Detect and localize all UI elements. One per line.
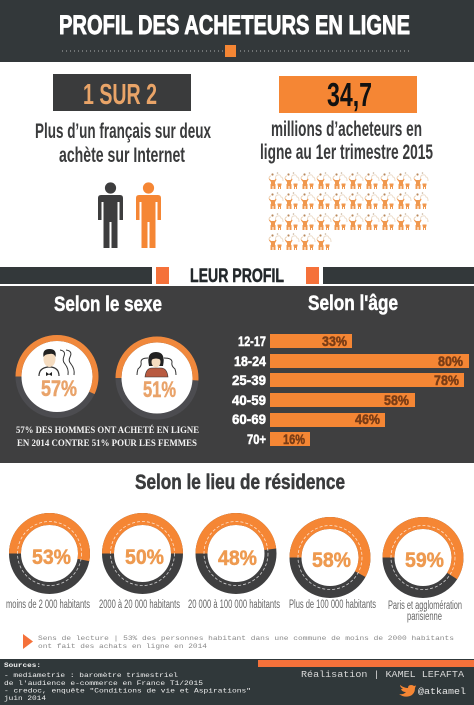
sources: de l'audience e-commerce en France T1/2015: [4, 680, 203, 687]
heading: selon le sexe: Selon le sexe: [54, 293, 162, 316]
bar 18-24: 18-24: [234, 353, 266, 369]
gauge: hommes 57%: 57%: [41, 376, 77, 401]
icon grid: 34 shoppers: [269, 172, 428, 250]
heading: selon l'âge: Selon l'âge: [308, 292, 398, 315]
donut labels: 2000 à 20 000 habitants: [99, 599, 180, 611]
caption: sexe: 57% DES HOMMES ONT ACHETÉ EN LIGNE: [16, 425, 199, 435]
stat: 34,7: [279, 76, 417, 113]
donut: 48%: [202, 519, 270, 588]
donut: 59%: 59%: [405, 549, 444, 572]
donut: 58%: 58%: [312, 549, 351, 572]
section banner: leur profil: [0, 266, 474, 287]
icon: women: [137, 352, 176, 377]
gauge: hommes 57%: [18, 338, 96, 415]
text: millions d'acheteurs: [260, 118, 433, 164]
gauge: femmes 51%: 51%: [143, 377, 176, 402]
stat: 34,7: 34,7: [327, 76, 372, 113]
footer: [0, 659, 474, 705]
bar 18-24: 80%: [438, 353, 463, 369]
bar 60-69: 60-69: [232, 411, 266, 427]
sources: [4, 662, 251, 702]
bar chart: âge: [232, 333, 469, 447]
bar 60-69: [232, 411, 385, 427]
bar 25-39: 25-39: [232, 372, 266, 388]
sources: - mediametrie : baromètre trimestriel: [4, 672, 178, 679]
bar 12-17: 12-17: [238, 333, 266, 349]
sources: juin 2014: [4, 695, 46, 702]
bar 70+: 70+: [247, 431, 266, 447]
reading note: ont fait des achats en ligne en 2014: [38, 643, 208, 650]
text: plus d'un français: achète sur Internet: [59, 144, 185, 167]
donut: 53%: [15, 519, 84, 588]
bar 40-59: [232, 392, 415, 408]
reading note: [23, 634, 455, 650]
donut: 59%: [388, 523, 458, 592]
bar 12-17: [238, 333, 352, 349]
text: plus d'un français: Plus d’un français sur deux: [35, 120, 211, 143]
bar 60-69: 46%: [355, 411, 380, 427]
stat: 1 sur 2: 1 SUR 2: [83, 79, 157, 111]
bar 70+: 16%: [283, 431, 305, 447]
donut: 58%: [296, 523, 364, 592]
donut labels: Plus de 100 000 habitants: [289, 599, 376, 611]
caption: sexe: [16, 425, 199, 448]
donut: 50%: [108, 519, 177, 588]
donut: 48%: 48%: [218, 547, 257, 570]
bar 25-39: 78%: [434, 372, 459, 388]
bar 18-24: [234, 353, 469, 369]
gauge: femmes 51%: [118, 340, 196, 416]
bar 70+: [247, 431, 310, 447]
panel: leur profil: [0, 286, 474, 463]
bar 40-59: 58%: [384, 392, 409, 408]
bar 12-17: 33%: [322, 333, 347, 349]
donut labels: [6, 599, 462, 623]
icon: men: [39, 349, 74, 376]
icon: twitter bird: [399, 685, 416, 697]
donut labels: moins de 2 000 habitants: [6, 599, 90, 611]
heading: lieu de résidence: Selon le lieu de résidence: [135, 471, 345, 494]
stat: 1 sur 2: [53, 74, 191, 111]
text: plus d'un français: [35, 120, 211, 167]
bar 25-39: [232, 372, 464, 388]
donut: 53%: 53%: [32, 546, 71, 569]
icon: two people: [98, 182, 161, 248]
header band: [0, 0, 474, 62]
bar 40-59: 40-59: [232, 392, 266, 408]
donut labels: parisienne: [407, 611, 442, 623]
caption: sexe: EN 2014 CONTRE 51% POUR LES FEMMES: [17, 438, 197, 448]
section banner: leur profil: LEUR PROFIL: [190, 266, 284, 287]
credit: Réalisation | KAMEL LEFAFTA: [301, 670, 465, 680]
reading note: Sens de lecture | 53% des personnes habitant dans une commune de moins de 2000 habitants: [38, 635, 455, 642]
icon: arrow: [23, 634, 33, 649]
donut labels: 20 000 à 100 000 habitants: [188, 599, 280, 611]
donut: 50%: 50%: [125, 546, 164, 569]
handle: @atkamel: [418, 687, 466, 697]
sources: Sources:: [4, 662, 41, 669]
sources: - credoc, enquête "Conditions de vie et Aspirations": [4, 688, 251, 694]
